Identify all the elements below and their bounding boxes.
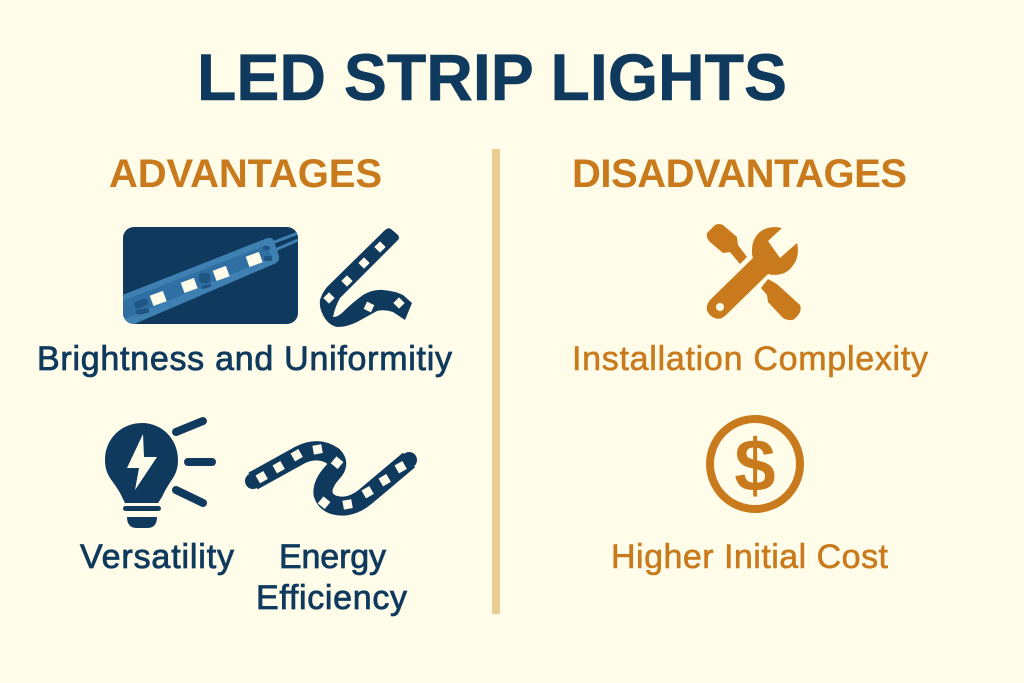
label: energy efficiency xyxy=(256,538,407,617)
icon: light bulb xyxy=(105,421,212,528)
label: brightness and uniformity: Brightness and Uniformitiy xyxy=(37,340,452,378)
icon: LED strip photo panel xyxy=(115,227,298,328)
heading: disadvantages: DISADVANTAGES xyxy=(572,152,907,196)
label: energy efficiency: Energy xyxy=(279,538,386,576)
icon: wavy LED ribbon xyxy=(253,444,409,510)
center divider xyxy=(492,149,500,614)
icon: curled LED ribbon xyxy=(320,228,412,327)
icon: dollar coin xyxy=(710,419,800,509)
icon: dollar coin: $ xyxy=(734,424,776,507)
label: energy efficiency: Efficiency xyxy=(256,579,407,617)
label: higher initial cost: Higher Initial Cost xyxy=(611,538,889,576)
heading: advantages: ADVANTAGES xyxy=(109,152,382,196)
title: LED STRIP LIGHTS xyxy=(197,40,787,114)
label: versatility: Versatility xyxy=(80,538,234,576)
icon: wrench and screwdriver xyxy=(707,224,801,320)
label: installation complexity: Installation Complexity xyxy=(572,340,928,378)
